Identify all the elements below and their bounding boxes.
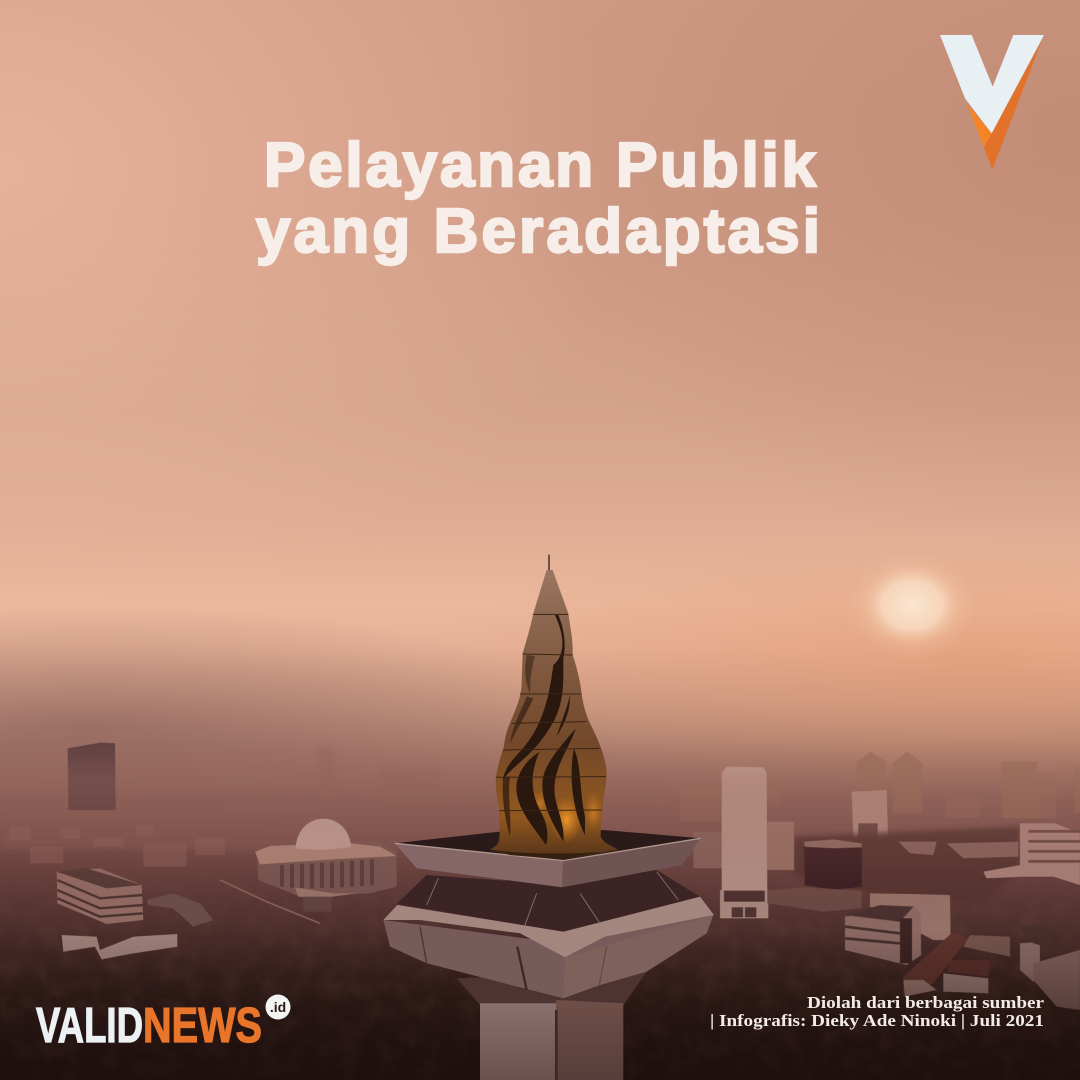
source credit: Diolah dari berbagai sumber (807, 993, 1045, 1012)
bottom vignette (0, 930, 1080, 1080)
title: Pelayanan Publik (264, 131, 817, 200)
title: yang Beradaptasi (256, 197, 820, 266)
title (256, 131, 820, 266)
mosque dome (296, 819, 351, 850)
mosque building (257, 842, 397, 897)
monument column (457, 972, 647, 1080)
dark tower (68, 743, 116, 810)
railway line (220, 880, 320, 923)
sun (846, 551, 978, 659)
logo: VALIDNEWS.id wordmark: NEWS (143, 999, 262, 1053)
tree band (793, 827, 1020, 903)
logo: VALIDNEWS.id wordmark (36, 994, 290, 1053)
red roofs (903, 932, 968, 997)
tower podium (720, 890, 768, 918)
left cityscape with tower and mosque (10, 743, 397, 959)
source credit: | Infografis: Dieky Ade Ninoki | Juli 2021 (710, 1011, 1044, 1030)
low white building (62, 934, 177, 959)
far buildings (680, 752, 1080, 822)
white cluster right (983, 823, 1080, 885)
right cityscape (680, 752, 1080, 1010)
stepped white tower (852, 790, 888, 847)
mid-ground low buildings (10, 803, 250, 867)
mesh safety net (397, 870, 700, 932)
back buildings beside tower (767, 822, 794, 870)
roofs (147, 893, 213, 927)
lower platform block (383, 897, 714, 998)
logo: VALIDNEWS.id wordmark: VALID (36, 999, 143, 1053)
logo mark: V emblem (940, 35, 1044, 169)
tall white tower (722, 767, 767, 893)
source credit (710, 993, 1045, 1030)
distant hazy skyline (0, 748, 1080, 850)
foreground buildings (870, 893, 951, 940)
upper tray (395, 830, 701, 887)
atmospheric haze over city (0, 740, 1080, 960)
golden flame (490, 555, 618, 859)
round office building (57, 868, 143, 924)
tree canopy texture (0, 850, 1080, 1080)
monument: Monas tower (383, 555, 714, 1080)
far right buildings (1020, 942, 1040, 982)
dark cylinder building (804, 839, 862, 890)
arcade (767, 887, 862, 912)
logo: VALIDNEWS.id wordmark: .id (270, 999, 286, 1015)
